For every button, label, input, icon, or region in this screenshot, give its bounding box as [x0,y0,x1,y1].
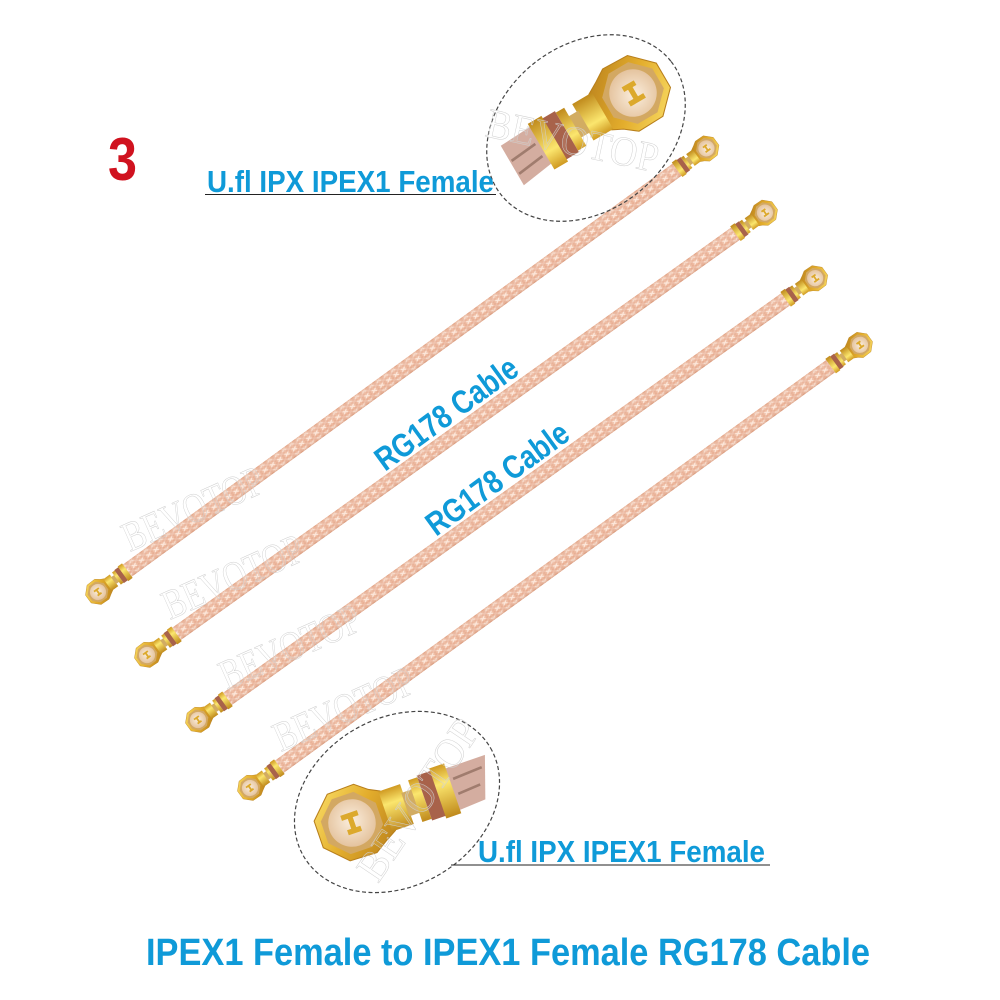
cable 1 [81,131,723,609]
watermarks: BEVOTOP [115,458,271,561]
watermarks [115,101,663,890]
watermarks: BEVOTOP [482,101,663,182]
label: RG178 cable upper: RG178 Cable [367,349,525,478]
watermarks: BEVOTOP [348,710,490,890]
label: top connector: U.fl IPX IPEX1 Female [207,164,494,199]
cable 2 [130,196,782,672]
label: RG178 cable lower: RG178 Cable [418,414,576,543]
number 3: 3 [108,126,137,193]
label: bottom connector: U.fl IPX IPEX1 Female [478,834,765,869]
watermarks: BEVOTOP [266,658,422,761]
watermarks: BEVOTOP [155,526,311,629]
watermarks: BEVOTOP [212,596,368,699]
callout: top connector detail [450,0,722,260]
cable 4 [233,328,877,805]
callout: bottom connector detail [261,675,533,929]
title: IPEX1 Female to IPEX1 Female RG178 Cable [146,932,870,974]
cable 3 [181,261,832,737]
